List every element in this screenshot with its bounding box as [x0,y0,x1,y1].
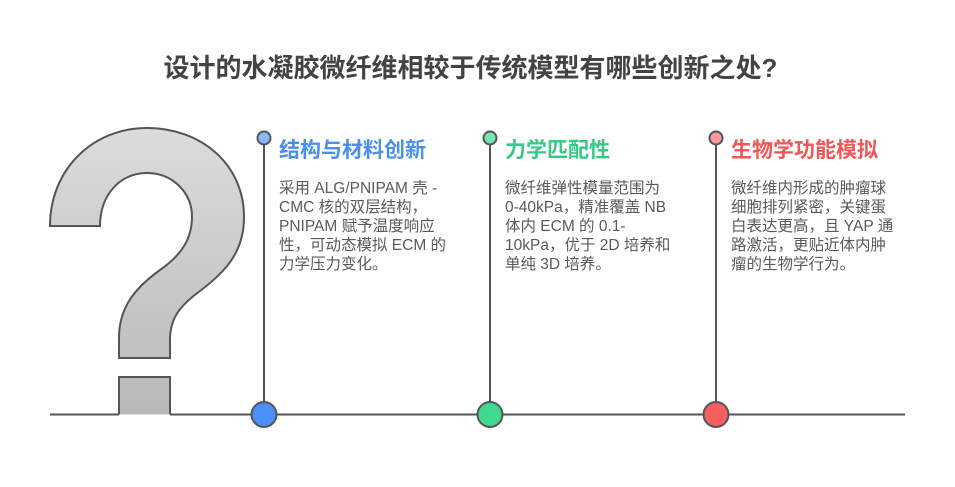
text: mechanical match: 体内 ECM 的 0.1- [505,218,626,235]
text: biological function: 瘤的生物学行为。 [731,256,855,273]
baseline [50,414,905,416]
text: mechanical match: 0-40kPa，精准覆盖 NB [505,199,666,216]
text: structure and materials [279,180,446,273]
text: structure and materials: CMC 核的双层结构， [279,199,427,216]
text: biological function: 路激活，更贴近体内肿 [731,237,886,254]
text: structure and materials: 性，可动态模拟 ECM 的 [279,237,446,254]
text: mechanical match: 10kPa，优于 2D 培养和 [505,237,670,254]
text: mechanical match: 单纯 3D 培养。 [505,256,611,273]
text: structure and materials: PNIPAM 赋予温度响应 [279,218,435,235]
marker: red timeline stem [704,132,728,427]
heading: mechanical match: 力学匹配性 [505,139,610,162]
text: biological function [731,180,893,273]
text: biological function: 微纤维内形成的肿瘤球 [731,180,886,197]
icon: question mark [50,128,244,414]
marker: blue timeline stem [252,132,276,427]
marker: green timeline stem [478,132,502,427]
heading: structure and materials: 结构与材料创新 [279,139,426,162]
heading: biological function: 生物学功能模拟 [731,139,878,162]
text: mechanical match [505,180,670,273]
text: biological function: 白表达更高，且 YAP 通 [731,218,893,235]
title: 设计的水凝胶微纤维相较于传统模型有哪些创新之处? [164,53,777,83]
text: structure and materials: 力学压力变化。 [279,256,388,273]
text: biological function: 细胞排列紧密，关键蛋 [731,199,886,216]
text: mechanical match: 微纤维弹性模量范围为 [505,180,660,197]
text: structure and materials: 采用 ALG/PNIPAM 壳 - [279,180,437,197]
